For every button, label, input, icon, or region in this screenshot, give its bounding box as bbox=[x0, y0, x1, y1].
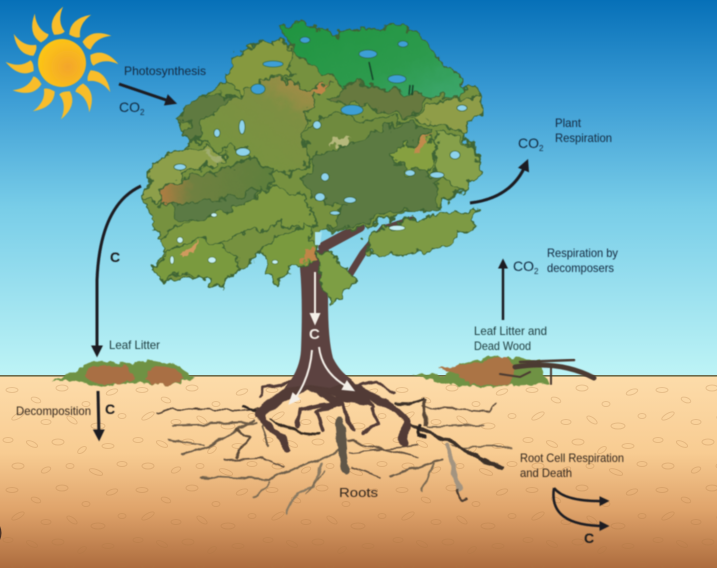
pale right root bbox=[447, 447, 460, 490]
label: CO2 photosynthesis: 2 bbox=[140, 108, 145, 117]
label: CO2 decomposers: CO bbox=[513, 258, 534, 274]
label: leaf litter and dead wood: Dead Wood bbox=[474, 339, 531, 353]
canopy: top green section bbox=[280, 22, 467, 97]
sky background bbox=[0, 0, 717, 377]
arrow: decomposition bbox=[98, 391, 99, 436]
canopy: lower right branch bbox=[363, 210, 480, 253]
label: plant respiration: Plant bbox=[555, 116, 582, 130]
label: roots: Roots bbox=[339, 485, 379, 500]
center dark root bbox=[340, 422, 346, 470]
canopy sky gaps bbox=[170, 37, 467, 264]
arrow: plant respiration bbox=[470, 164, 526, 203]
label: leaf litter: Leaf Litter bbox=[109, 338, 160, 352]
canopy: lower left section bbox=[160, 187, 317, 253]
label: respiration by decomposers: Respiration by bbox=[547, 246, 618, 260]
canopy: leaf over trunk bbox=[317, 250, 357, 305]
canopy: upper dark olive bbox=[330, 80, 430, 117]
tree roots bbox=[157, 372, 513, 513]
label: CO2 decomposers: 2 bbox=[534, 267, 539, 276]
label: plant respiration: Respiration bbox=[555, 131, 612, 145]
leaf litter and dead wood pile right bbox=[412, 356, 594, 387]
large brown roots bbox=[260, 377, 407, 450]
label: decomposition: Decomposition bbox=[16, 404, 91, 418]
label: CO2 plant respiration: CO bbox=[518, 135, 539, 151]
canopy: olive band bbox=[157, 157, 273, 207]
label: carbon root: C bbox=[584, 530, 594, 546]
canopy: lower dark band bbox=[170, 190, 257, 220]
canopy: lower left clump bbox=[153, 237, 243, 290]
text and arrows bbox=[16, 64, 624, 546]
label: Photosynthesis: Photosynthesis bbox=[124, 64, 206, 78]
canopy: center dark bbox=[303, 123, 437, 230]
arrow: decomposer respiration bbox=[502, 263, 504, 320]
canopy: silhouette base bbox=[143, 42, 483, 290]
label: respiration by decomposers: decomposers bbox=[547, 261, 614, 275]
trunk carbon flow: C bbox=[309, 326, 320, 343]
label: root cell respiration and death: Root Cell Respiration bbox=[520, 451, 624, 465]
arrows: root respiration bbox=[553, 488, 605, 526]
label: carbon decomposition: C bbox=[105, 401, 115, 417]
tree canopy bbox=[143, 22, 483, 305]
canopy: right top light bbox=[407, 97, 483, 130]
thin fine roots bbox=[157, 403, 513, 513]
canopy: right light bbox=[433, 133, 480, 190]
canopy: upper center bbox=[303, 113, 407, 160]
label: carbon to litter: C bbox=[110, 249, 120, 265]
canopy: right center light bbox=[390, 137, 437, 173]
trunk carbon flow bbox=[290, 272, 353, 403]
arrow: carbon to leaf litter bbox=[97, 186, 141, 352]
dark right root bbox=[407, 423, 503, 468]
canopy: low center clump bbox=[263, 223, 317, 283]
soil ground bbox=[0, 375, 717, 568]
label: CO2 photosynthesis: CO bbox=[119, 99, 140, 115]
canopy: upper left leaves bbox=[228, 42, 293, 93]
arrow: CO2 into canopy bbox=[119, 84, 172, 102]
tree trunk and branches bbox=[285, 105, 412, 388]
canopy: left light branch bbox=[143, 147, 227, 200]
label: root cell respiration and death: and Death bbox=[520, 466, 572, 480]
canopy: dark left lobe bbox=[178, 95, 243, 142]
canopy: main left section bbox=[197, 80, 330, 173]
icon: sun bbox=[6, 7, 118, 119]
label: leaf litter and dead wood: Leaf Litter and bbox=[474, 324, 547, 338]
label: CO2 plant respiration: 2 bbox=[539, 144, 544, 153]
leaf litter pile left bbox=[50, 361, 194, 387]
